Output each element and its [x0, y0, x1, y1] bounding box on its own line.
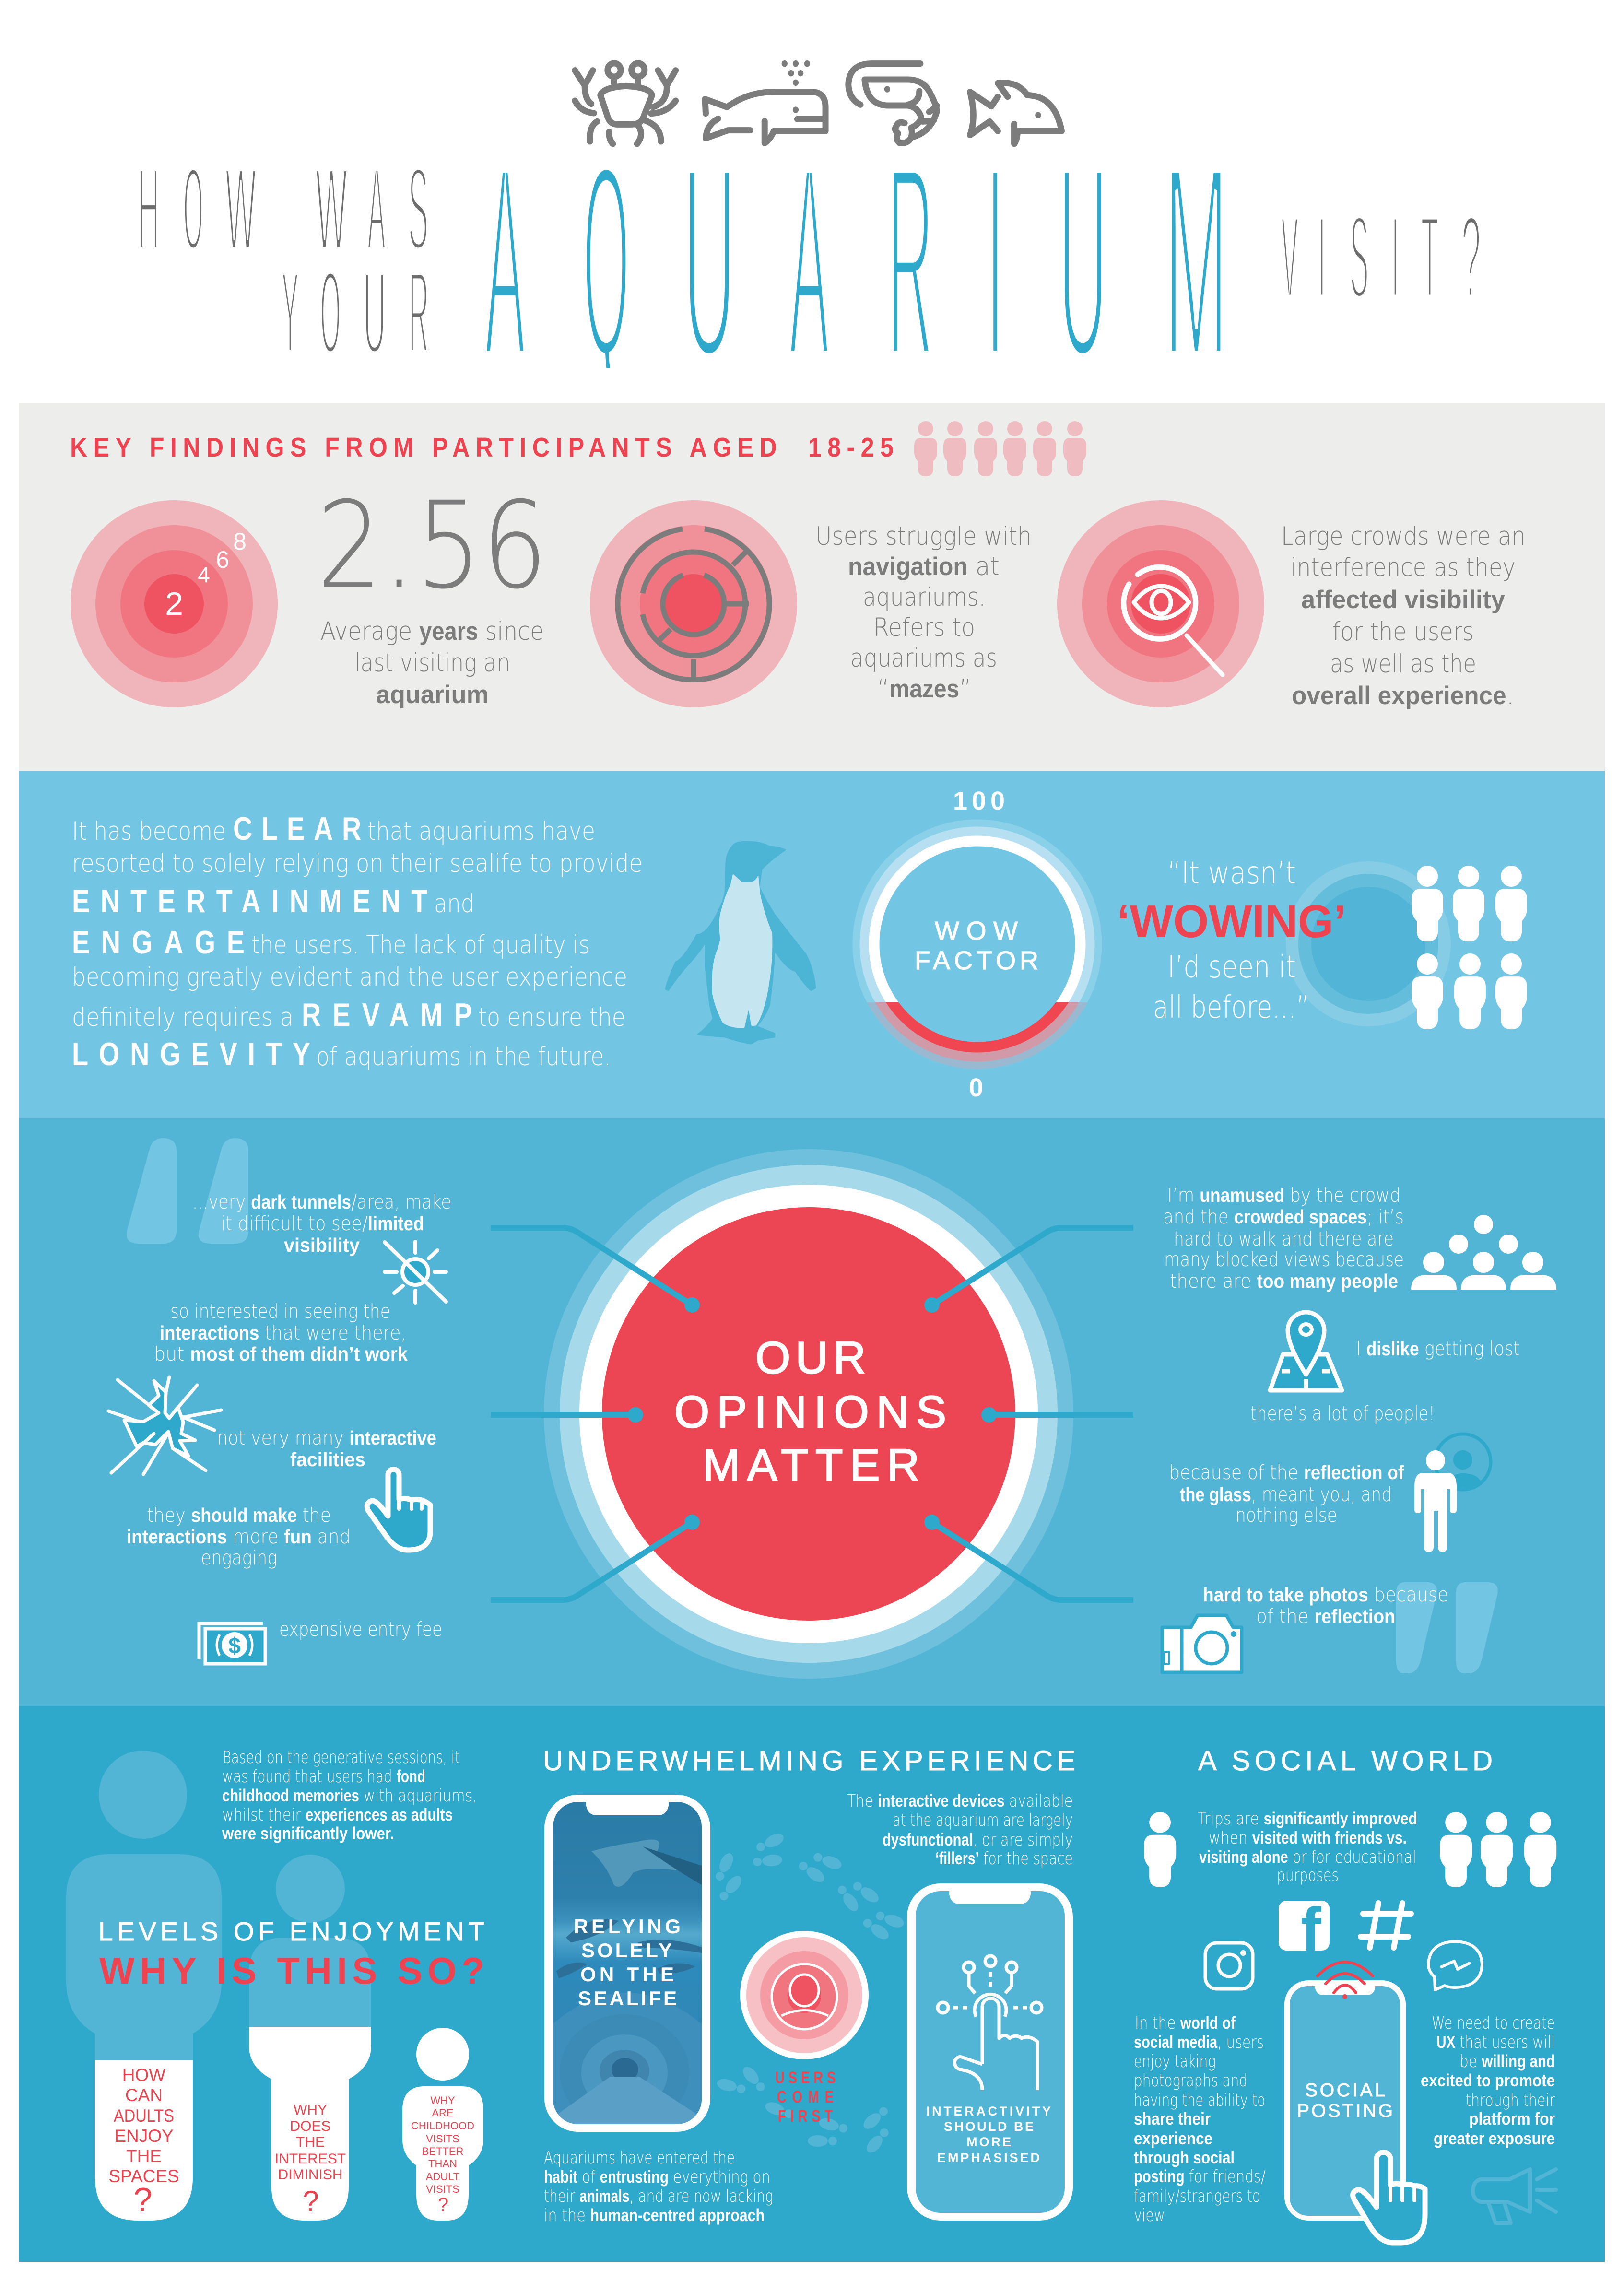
text: average years — [320, 617, 544, 709]
decorative circles behind quote — [1286, 861, 1451, 1026]
heading: why is this so: WHY IS THIS SO? — [99, 1950, 484, 1992]
icon: touch interaction — [938, 1956, 1042, 2090]
text: clear statement: REVAMP — [302, 997, 472, 1033]
text: dark tunnels: visibility — [284, 1234, 360, 1256]
text: ux promote — [1421, 2013, 1555, 2148]
icon: crab — [575, 63, 676, 144]
target chart: years since last visit: 2 — [165, 586, 183, 622]
icon: cracked glass — [108, 1377, 221, 1474]
title: visit?: S — [1350, 191, 1369, 322]
text: hard to take photos: hard to take photos because — [1203, 1583, 1448, 1606]
icon: instagram — [1205, 1943, 1253, 1989]
phone: relying on sealife: SOLELY — [581, 1939, 672, 1962]
text: generative sessions: was found that users had fond — [222, 1766, 425, 1787]
title: aquarium: A — [789, 108, 829, 414]
title: aquarium: R — [887, 108, 933, 414]
icon: money — [199, 1623, 265, 1664]
stat: 2.56: 2.56 — [317, 476, 548, 615]
text: navigation — [815, 522, 1032, 704]
text: average years: aquarium — [376, 681, 489, 709]
icon: pointing hand — [367, 1470, 430, 1550]
text: trips improved: purposes — [1277, 1866, 1339, 1885]
figure: teen person: INTEREST — [275, 2151, 346, 2167]
title: how was: O — [183, 144, 203, 274]
icon: no light — [385, 1242, 446, 1303]
title: aquarium: Q — [583, 108, 630, 414]
text: ux promote: greater exposure — [1434, 2128, 1555, 2148]
figure: child person: ARE — [432, 2107, 454, 2119]
figure: child person: THAN — [428, 2158, 457, 2170]
text: clear statement: It has become — [72, 817, 226, 846]
heading: underwhelming experience: UNDERWHELMING EXPERIENCE — [543, 1745, 1075, 1776]
icon: facebook: f — [1301, 1895, 1321, 1964]
phone: social posting — [1284, 1962, 1425, 2243]
title: how was: H — [138, 143, 159, 274]
text: world of social media: through social — [1134, 2148, 1235, 2167]
text: interactive devices — [847, 1791, 1073, 1869]
phone: interactivity: EMPHASISED — [937, 2151, 1040, 2165]
title: your — [282, 247, 429, 378]
heading: our opinions matter — [674, 1332, 946, 1490]
text: generative sessions: Based on the generative sessions, it — [223, 1748, 460, 1767]
icon: lone visitor — [1144, 1812, 1176, 1887]
figure: child person — [402, 2028, 483, 2221]
icon: money: $ — [228, 1633, 241, 1658]
icon: six white people — [1412, 866, 1527, 1029]
title: your: R — [409, 247, 429, 378]
title: your: U — [363, 247, 386, 377]
text: dark tunnels — [192, 1190, 451, 1256]
icon: shrimp — [848, 64, 937, 143]
header icons: crab, whale, shrimp, fish — [575, 60, 1061, 144]
text: should make — [127, 1504, 351, 1569]
text: world of social media: In the world of — [1135, 2013, 1236, 2033]
figure: child person: VISITS — [426, 2133, 459, 2145]
heading: our opinions matter: OPINIONS — [674, 1387, 946, 1437]
text: clear statement: CLEAR — [233, 811, 361, 847]
phone: social posting: POSTING — [1297, 2101, 1393, 2121]
phone: social posting: SOCIAL — [1305, 2080, 1385, 2101]
figure: teen person: DIMINISH — [278, 2167, 342, 2183]
text: world of social media: experience — [1134, 2128, 1212, 2148]
text: clear statement: becoming greatly evident and the user experience — [72, 963, 627, 992]
text: interactive devices: at the aquarium are largely — [893, 1811, 1073, 1830]
text: crowded spaces: and the crowded spaces; it’s — [1163, 1205, 1404, 1228]
text: entrusting animals — [544, 2148, 773, 2225]
text: entrusting animals: Aquariums have entered the — [544, 2148, 735, 2168]
phone: relying on sealife: ON THE — [580, 1963, 674, 1986]
text: world of social media: social media, users — [1134, 2032, 1264, 2052]
text: navigation: Users struggle with — [815, 522, 1032, 551]
text: reflection: nothing else — [1236, 1504, 1337, 1527]
text: average years: Average years since — [320, 617, 544, 646]
title: how was: W — [225, 143, 256, 274]
title: how was: A — [368, 144, 385, 274]
title: visit?: I — [1318, 192, 1325, 322]
text: clear statement: of aquariums in the future. — [316, 1042, 611, 1071]
text: getting lost: I dislike getting lost — [1356, 1337, 1520, 1360]
text: world of social media — [1134, 2013, 1266, 2225]
text: hard to take photos — [1203, 1583, 1448, 1628]
text: world of social media: enjoy taking — [1134, 2052, 1216, 2071]
icon: users come first — [740, 1931, 869, 2059]
text: clear statement: ENGAGE — [72, 925, 245, 961]
text: clear statement: resorted to solely relying on their sealife to provide — [72, 849, 643, 878]
figure: adult person: HOW — [122, 2065, 165, 2085]
title: aquarium: M — [1164, 108, 1228, 414]
phone: interactivity: MORE — [966, 2135, 1011, 2149]
icon: fish — [970, 83, 1061, 144]
target chart: years since last visit: 8 — [233, 528, 247, 555]
text: crowds: overall experience. — [1292, 681, 1514, 710]
text: crowds: interference as they — [1291, 553, 1516, 582]
heading: our opinions matter: MATTER — [703, 1440, 919, 1490]
icon: map pin — [1270, 1312, 1342, 1390]
text: world of social media: share their — [1134, 2109, 1211, 2128]
quote: wowing: I’d seen it — [1167, 950, 1296, 985]
text: generative sessions: childhood memories with aquariums, — [222, 1786, 477, 1806]
text: generative sessions — [222, 1748, 477, 1843]
icon: penguin — [666, 842, 815, 1044]
figure: child person: WHY — [430, 2094, 455, 2106]
panel: wow factor — [19, 771, 1605, 1118]
central circle — [491, 1149, 1133, 1679]
text: navigation: navigation at — [848, 552, 1000, 581]
heading: key findings: KEY FINDINGS FROM PARTICIPANTS AGED 18-25 — [70, 432, 894, 463]
text: crowds — [1281, 522, 1526, 710]
title: how was: W — [316, 144, 347, 275]
title: aquarium: U — [683, 108, 736, 414]
figure: adult person: ENJOY — [114, 2126, 174, 2146]
text: generative sessions: were significantly lower. — [222, 1823, 394, 1843]
quote: wowing — [1117, 856, 1346, 1025]
text: interactions: but most of them didn’t work — [154, 1342, 408, 1365]
icon: camera — [1162, 1615, 1242, 1672]
text: entry fee: expensive entry fee — [279, 1618, 442, 1641]
text: dark tunnels: ...very dark tunnels/area, make — [192, 1190, 451, 1213]
quote: wowing: “It wasn’t — [1167, 856, 1296, 891]
text: world of social media: having the ability to — [1134, 2091, 1265, 2110]
text: interactions: so interested in seeing the — [170, 1300, 390, 1323]
text: ux promote: UX that users will — [1436, 2032, 1555, 2052]
figure: adult person: CAN — [125, 2085, 163, 2105]
text: world of social media: family/strangers to — [1134, 2187, 1260, 2206]
text: world of social media: view — [1134, 2206, 1165, 2225]
title: aquarium: U — [1058, 108, 1108, 414]
text: navigation: aquariums as — [850, 644, 997, 673]
title: your: O — [320, 247, 341, 378]
text: interactions: interactions that were there, — [160, 1321, 406, 1344]
figure: child person: VISITS — [426, 2183, 459, 2195]
text: crowds: affected visibility — [1301, 586, 1506, 614]
figure: teen person: WHY — [294, 2102, 327, 2118]
figure: adult person: ADULTS — [114, 2106, 174, 2126]
figure: adult person — [66, 1751, 222, 2221]
text: crowds: Large crowds were an — [1281, 522, 1526, 551]
figure: teen person: DOES — [290, 2118, 331, 2134]
text: generative sessions: whilst their experiences as adults — [222, 1805, 453, 1825]
title — [138, 108, 1481, 414]
footprints — [713, 1831, 906, 2155]
text: entrusting animals: habit of entrusting everything on — [544, 2167, 770, 2187]
text: interactive facilities: not very many interactive — [217, 1426, 436, 1449]
text: should make: interactions more fun and — [127, 1525, 351, 1548]
figure: child person: ADULT — [426, 2171, 459, 2183]
title: visit?: T — [1421, 191, 1438, 322]
label: users come first: FIRST — [778, 2107, 833, 2126]
title: visit? — [1282, 191, 1481, 323]
title: visit?: V — [1282, 192, 1298, 323]
icon: tapping hand — [1353, 2152, 1425, 2243]
panel: our opinions matter — [19, 1118, 1605, 1706]
figure: child person: BETTER — [422, 2145, 463, 2157]
text: clear statement — [72, 811, 643, 1072]
title: how was — [138, 143, 428, 275]
text: ux promote: We need to create — [1432, 2013, 1555, 2033]
phone: interactivity: INTERACTIVITY — [926, 2104, 1051, 2118]
phone: relying on sealife: SEALIFE — [578, 1987, 677, 2010]
text: lot of people: there’s a lot of people! — [1250, 1402, 1435, 1425]
text: reflection: because of the reflection of — [1169, 1461, 1404, 1484]
text: interactive facilities: facilities — [290, 1448, 365, 1470]
text: ux promote: be willing and — [1459, 2051, 1555, 2071]
panel: why is this so — [19, 1706, 1605, 2262]
text: interactive devices: dysfunctional, or are simply — [883, 1830, 1073, 1850]
gauge: wow factor — [853, 787, 1102, 1102]
text: crowded spaces: I’m unamused by the crowd — [1167, 1184, 1400, 1207]
icon: maze — [590, 500, 797, 707]
text: world of social media: photographs and — [1134, 2071, 1247, 2091]
text: hard to take photos: of the reflection — [1256, 1605, 1395, 1628]
figure: adult person: SPACES — [108, 2166, 179, 2186]
aquarium photo — [553, 1840, 702, 2129]
text: trips improved — [1198, 1809, 1417, 1885]
title: aquarium: I — [986, 108, 1004, 414]
icon: messenger — [1428, 1941, 1482, 1990]
icon: person and reflection — [1414, 1434, 1491, 1552]
text: clear statement: the users. The lack of quality is — [251, 930, 590, 960]
icon: magnifier and eye — [1057, 500, 1264, 707]
text: crowds: as well as the — [1330, 649, 1476, 679]
text: reflection: the glass, meant you, and — [1180, 1483, 1392, 1506]
text: trips improved: Trips are significantly improved — [1198, 1809, 1417, 1829]
text: navigation: aquariums. — [863, 583, 986, 612]
text: interactive devices: ‘fillers’ for the space — [935, 1848, 1073, 1869]
text: dark tunnels: it difficult to see/limited — [221, 1212, 424, 1235]
icon: crowd — [1411, 1215, 1556, 1290]
heading: levels of enjoyment: LEVELS OF ENJOYMENT — [98, 1917, 484, 1946]
text: clear statement: to ensure the — [478, 1003, 625, 1032]
icon: wifi signal — [1318, 1962, 1373, 1999]
text: entrusting animals: their animals, and are now lacking — [544, 2186, 773, 2206]
text: trips improved: visiting alone or for educational — [1199, 1847, 1416, 1867]
phone: interactivity: SHOULD BE — [944, 2119, 1034, 2134]
text: should make: engaging — [201, 1546, 277, 1569]
target chart: years since last visit — [71, 500, 278, 707]
target chart: years since last visit: 6 — [216, 546, 229, 573]
title: your: Y — [282, 247, 299, 378]
quote: wowing: all before...” — [1153, 990, 1309, 1025]
text: reflection — [1169, 1461, 1404, 1527]
text: should make: they should make the — [147, 1504, 331, 1527]
heading: a social world: A SOCIAL WORLD — [1198, 1745, 1493, 1776]
text: interactive facilities — [217, 1426, 436, 1470]
title: how was: S — [408, 143, 428, 274]
phone: relying on sealife: RELYING — [574, 1915, 681, 1938]
target chart: years since last visit: 4 — [198, 562, 210, 587]
label: users come first: USERS — [775, 2069, 836, 2087]
text: navigation: Refers to — [873, 613, 975, 642]
text: ux promote: excited to promote — [1421, 2070, 1555, 2090]
title: visit?: ? — [1461, 192, 1481, 323]
text: crowded spaces: there are too many people — [1170, 1270, 1398, 1293]
figure: teen person: THE — [296, 2134, 325, 2150]
quote: wowing: ‘WOWING’ — [1117, 896, 1346, 947]
icon: facebook — [1279, 1895, 1330, 1964]
text: clear statement: LONGEVITY — [72, 1036, 310, 1072]
text: navigation: “mazes” — [877, 674, 971, 704]
heading: our opinions matter: OUR — [755, 1332, 866, 1383]
gauge: wow factor: 100 — [953, 787, 1005, 815]
text: clear statement: and — [434, 889, 474, 918]
gauge: wow factor: WOW — [935, 917, 1018, 945]
icon: three friends — [1440, 1812, 1556, 1887]
text: trips improved: when visited with friends vs. — [1209, 1828, 1407, 1848]
figure: adult person: ? — [134, 2181, 152, 2218]
connector lines — [491, 1228, 1133, 1600]
icon: six people — [914, 421, 1086, 476]
icon: hashtag — [1361, 1903, 1411, 1948]
figure: teen person: ? — [303, 2185, 319, 2217]
figure: adult person: THE — [126, 2146, 162, 2166]
label: users come first — [775, 2069, 836, 2126]
text: interactions — [154, 1300, 408, 1365]
gauge: wow factor: 0 — [969, 1073, 983, 1102]
panel: key findings — [19, 403, 1605, 771]
text: average years: last visiting an — [354, 648, 510, 678]
text: clear statement: ENTERTAINMENT — [72, 883, 427, 919]
title: aquarium — [485, 108, 1228, 414]
title: visit?: I — [1392, 192, 1399, 322]
text: entrusting animals: in the human-centred approach — [544, 2205, 765, 2225]
phone: interactivity — [907, 1883, 1073, 2221]
icon: closing quote mark — [1396, 1582, 1498, 1673]
icon: megaphone — [1473, 2169, 1556, 2223]
gauge: wow factor: FACTOR — [915, 946, 1038, 975]
text: clear statement: definitely requires a — [72, 1003, 294, 1032]
text: crowds: for the users — [1332, 617, 1474, 647]
figure: teen person — [249, 1855, 371, 2221]
text: crowded spaces: hard to walk and there are — [1174, 1227, 1394, 1250]
text: ux promote: platform for — [1469, 2109, 1555, 2128]
text: clear statement: that aquariums have — [367, 817, 595, 846]
title: aquarium: A — [485, 108, 526, 414]
label: users come first: COME — [777, 2088, 834, 2106]
text: ux promote: through their — [1466, 2091, 1555, 2110]
phone: relying on sealife — [544, 1795, 710, 2132]
icon: whale — [705, 60, 825, 143]
icon: opening quote mark — [127, 1138, 248, 1244]
text: crowded spaces: many blocked views because — [1164, 1248, 1404, 1271]
text: world of social media: posting for friends/ — [1134, 2166, 1266, 2187]
figure: child person: ? — [438, 2194, 448, 2215]
figure: child person: CHILDHOOD — [411, 2120, 474, 2132]
text: crowded spaces — [1163, 1184, 1404, 1293]
text: interactive devices: The interactive devices available — [847, 1791, 1073, 1811]
